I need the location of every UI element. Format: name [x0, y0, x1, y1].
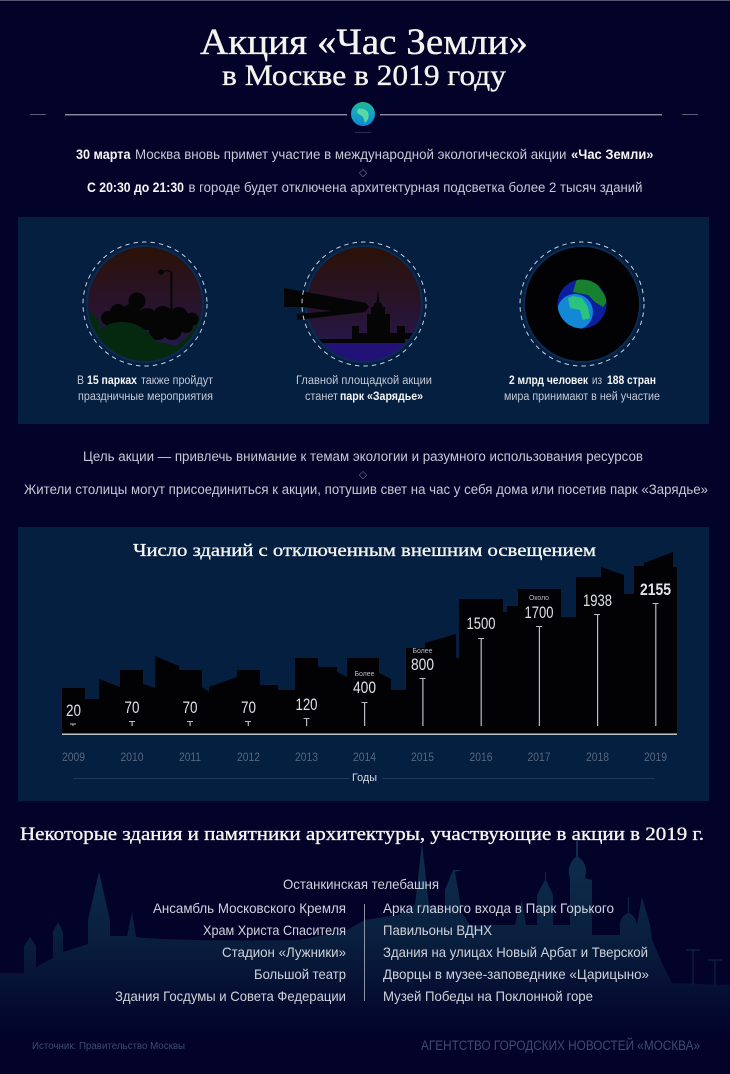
goal text [24, 449, 708, 497]
title: Акция «Час Земли» [200, 22, 528, 63]
divider with globe [30, 102, 698, 133]
caption: world [504, 375, 660, 403]
intro text [76, 147, 654, 195]
goal text: ◇ [359, 471, 367, 480]
right column: Дворцы в музее-заповеднике «Царицыно» [383, 966, 649, 982]
years axis labels: 2013 [295, 752, 318, 764]
intro text: ◇ [359, 169, 367, 178]
left column: Ансамбль Московского Кремля [153, 900, 346, 916]
right column: Павильоны ВДНХ [383, 922, 493, 938]
title: в Москве в 2019 году [222, 59, 506, 92]
years axis labels: 2011 [179, 752, 201, 764]
years axis labels: 2017 [528, 752, 550, 764]
panel: chart [18, 527, 709, 801]
caption: parks: 15 парках [87, 375, 138, 387]
values: 800 [411, 656, 434, 674]
icon: Zaryadye and skyscraper [284, 242, 430, 368]
axis title: Годы [352, 772, 377, 784]
intro text: в городе будет отключена архитектурная подсветка более 2 тысяч зданий [188, 180, 642, 195]
years axis labels: 2015 [411, 752, 434, 764]
intro text: 30 марта [76, 147, 131, 162]
title [200, 22, 528, 92]
years axis labels: 2014 [353, 752, 377, 764]
caption: parks: праздничные мероприятия [78, 391, 213, 403]
top edge strip [0, 0, 730, 1]
caption: world: 2 млрд человек [509, 375, 588, 387]
values: 1700 [524, 604, 554, 622]
list of buildings: Останкинская телебашня [283, 876, 439, 892]
values: 120 [296, 696, 318, 714]
icon: park at night [82, 242, 208, 366]
left column: Большой театр [254, 966, 346, 982]
caption: world: мира принимают в ней участие [504, 391, 660, 403]
right column: Арка главного входа в Парк Горького [383, 900, 614, 916]
values: Более [354, 669, 374, 678]
values: Более [412, 646, 432, 655]
caption: parks: также пройдут [141, 375, 214, 387]
years axis labels: 2012 [237, 752, 260, 764]
left column: Стадион «Лужники» [222, 944, 346, 960]
icon: Earth [520, 242, 644, 366]
caption: Zaryadye [296, 375, 432, 403]
caption: parks [77, 375, 214, 403]
source: Источник: Правительство Москвы [32, 1041, 185, 1052]
fact: parks [77, 242, 214, 403]
right column: Музей Победы на Поклонной горе [383, 988, 593, 1004]
values: 1500 [466, 615, 496, 633]
left column: Здания Госдумы и Совета Федерации [115, 988, 346, 1004]
goal text: Цель акции — привлечь внимание к темам экологии и разумного использования ресурсов [83, 449, 643, 464]
values: 70 [241, 699, 256, 717]
years axis labels: 2010 [120, 752, 144, 764]
list of buildings [115, 876, 649, 1004]
caption: parks: В [77, 375, 84, 387]
caption: world: из [592, 375, 602, 387]
values: 70 [124, 699, 140, 717]
values: 70 [182, 699, 198, 717]
goal text: Жители столицы могут присоединиться к акции, потушив свет на час у себя дома или посетив парк «Зарядье» [24, 482, 708, 497]
intro text: Москва вновь примет участие в международной экологической акции [135, 147, 566, 162]
values [66, 581, 671, 720]
fact: Zaryadye [284, 242, 432, 403]
values: 2155 [640, 581, 671, 599]
right column [383, 900, 649, 1004]
panel: three facts [18, 217, 709, 424]
chart title: Число зданий с отключенным внешним освещением [133, 540, 596, 560]
section heading: Некоторые здания и памятники архитектуры, участвующие в акции в 2019 г. [20, 824, 704, 845]
values: 20 [66, 702, 81, 720]
bars [70, 603, 658, 726]
icon: small globe [351, 102, 375, 133]
fact: world [504, 242, 660, 403]
city silhouette background [0, 840, 730, 1074]
intro text: «Час Земли» [571, 147, 654, 162]
caption: world: 188 стран [607, 375, 656, 387]
caption: Zaryadye: станет [305, 391, 339, 403]
years axis labels: 2019 [644, 752, 667, 764]
intro text: С 20:30 до 21:30 [87, 180, 184, 195]
left column [115, 900, 346, 1004]
years axis labels: 2009 [62, 752, 85, 764]
years axis labels: 2018 [586, 752, 609, 764]
caption: Zaryadye: парк «Зарядье» [340, 391, 423, 403]
years axis labels: 2016 [470, 752, 492, 764]
right column: Здания на улицах Новый Арбат и Тверской [383, 944, 648, 960]
chart: skyline silhouette [62, 552, 677, 734]
left column: Храм Христа Спасителя [203, 922, 346, 938]
values: 1938 [583, 592, 612, 610]
years axis labels [62, 752, 667, 764]
values: 400 [353, 679, 376, 697]
values: Около [529, 593, 549, 602]
caption: Zaryadye: Главной площадкой акции [296, 375, 432, 387]
axis [62, 734, 677, 735]
